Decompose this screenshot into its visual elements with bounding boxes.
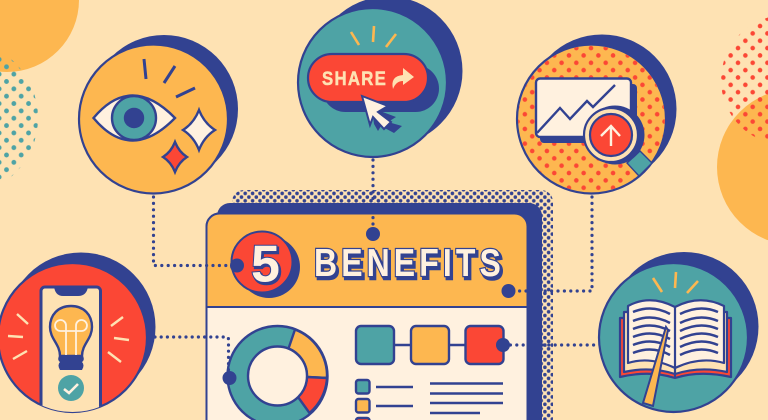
badge with number 5: 5 [251, 236, 280, 294]
heading: BENEFITS: BENEFITS [314, 241, 505, 285]
card halftone shadow [232, 190, 553, 420]
check badge [58, 375, 84, 401]
screen [536, 78, 631, 137]
connector: chart to card [510, 197, 592, 291]
panel: bulb icon circle [0, 252, 156, 420]
connector: bulb to donut [155, 337, 228, 378]
rays [653, 272, 698, 293]
pencil [643, 327, 668, 406]
flow of three squares [356, 326, 504, 364]
connector: eye to badge [154, 197, 236, 266]
connector: book to squares [503, 343, 600, 347]
badge with number 5 [232, 232, 300, 298]
decorative red halftone circle [721, 15, 768, 145]
icon: eye [94, 96, 175, 140]
panel: book icon circle [599, 252, 758, 412]
share button [308, 54, 439, 112]
phone [41, 286, 100, 420]
rays [8, 314, 129, 362]
connector: share to card [371, 160, 375, 234]
panel: eye icon circle [79, 35, 238, 194]
decorative orange circle top left [0, 0, 79, 72]
panel: share icon circle [298, 0, 462, 157]
panel: chart icon circle [517, 34, 676, 194]
icon: red sparkle [163, 142, 187, 172]
line chart [537, 85, 615, 133]
icon: rays [144, 59, 195, 97]
bulb [50, 306, 92, 370]
share button: SHARE [322, 68, 387, 89]
open book [620, 300, 731, 378]
badge with number 5: 5 [253, 238, 281, 296]
decorative teal halftone circle [0, 40, 38, 196]
card header [206, 214, 528, 307]
legend list [356, 380, 503, 420]
handle [627, 151, 652, 176]
card body [206, 214, 528, 420]
heading: BENEFITS: BENEFITS [316, 244, 507, 287]
rays [351, 26, 396, 47]
connector nodes [222, 227, 516, 385]
magnifier [584, 106, 644, 164]
panel: benefits card [206, 190, 553, 420]
cursor [362, 96, 402, 133]
icon: cream sparkle [183, 110, 215, 150]
screen shadow [540, 84, 637, 143]
decorative orange circle right [717, 89, 768, 245]
donut chart [228, 326, 328, 420]
card navy shadow [217, 203, 542, 420]
